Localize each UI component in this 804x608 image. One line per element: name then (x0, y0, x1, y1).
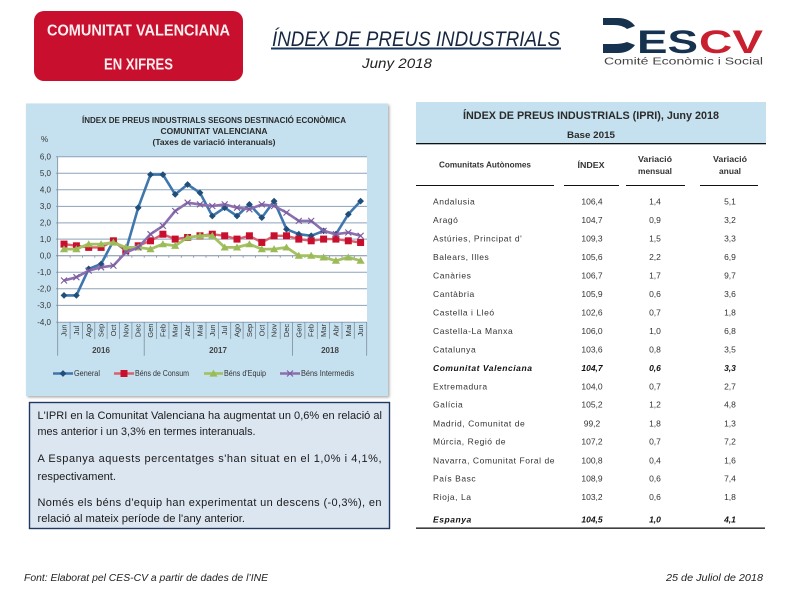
x axis month labels: Feb (307, 324, 316, 337)
x axis month labels (60, 323, 365, 338)
row: Cantàbria (433, 289, 736, 299)
y axis labels: -1,0 (37, 268, 52, 277)
row: Aragó: Aragó (433, 215, 458, 225)
row: Catalunya: 3,5 (724, 344, 736, 354)
row: Castella i Lleó: 0,7 (649, 308, 661, 318)
row: Navarra (433, 456, 736, 466)
row: Astúries: 3,3 (724, 234, 736, 244)
row: Castella i Lleó: 1,8 (724, 308, 736, 318)
row: Espanya: 104,5 (581, 514, 603, 524)
table column headers: Comunitats Autònomes (439, 160, 532, 170)
row: Balears: 105,6 (581, 252, 603, 262)
row: Comunitat Valenciana (433, 363, 736, 373)
logo: CES-CV: ES (637, 24, 698, 60)
x axis month labels: Oct (257, 324, 266, 336)
logo: CES-CV (603, 18, 764, 68)
row: Aragó (433, 215, 736, 225)
row: Castella-La Manxa: Castella-La Manxa (433, 326, 513, 336)
chart title (41, 116, 346, 147)
x axis month labels: Feb (158, 324, 167, 337)
paragraph: Espanya (38, 453, 382, 483)
x axis month labels: Gen (146, 323, 155, 338)
row: Balears (433, 252, 736, 262)
x axis month labels: Jul (220, 325, 229, 335)
y axis labels: 0,0 (40, 252, 52, 260)
x axis year labels: 2017 (209, 346, 227, 355)
row: Balears: 2,2 (649, 252, 661, 262)
row: Balears: Balears, Illes (433, 252, 489, 262)
row: Madrid: 99,2 (584, 418, 601, 428)
row: Castella-La Manxa: 1,0 (649, 326, 661, 336)
row: Espanya: 4,1 (723, 514, 736, 524)
row: Extremadura: 104,0 (581, 382, 603, 392)
y axis labels: -3,0 (37, 301, 52, 310)
title: ÍNDEX DE PREUS INDUSTRIALS (272, 28, 560, 51)
row: Aragó: 3,2 (724, 215, 736, 225)
row: Comunitat Valenciana: 0,6 (649, 363, 661, 373)
row: Cantàbria: 0,6 (649, 289, 661, 299)
x axis month labels: Jun (208, 324, 217, 337)
row: Astúries: 1,5 (649, 234, 661, 244)
x axis month labels: Jun (60, 324, 68, 337)
row: Comunitat Valenciana: 104,7 (581, 363, 604, 373)
x axis month labels: Mar (319, 324, 328, 337)
row: Cantàbria: 105,9 (581, 289, 603, 299)
y axis labels: 5,0 (40, 169, 52, 178)
row: Rioja (433, 492, 736, 502)
x axis year labels: 2016 (92, 346, 110, 355)
row: Castella-La Manxa: 106,0 (581, 326, 603, 336)
row: Espanya (433, 514, 736, 524)
paragraph: IPRI Comunitat Valenciana (38, 410, 382, 438)
table column headers (439, 155, 747, 176)
y axis labels: -4,0 (37, 318, 52, 327)
y axis labels: 2,0 (40, 218, 52, 228)
row: Múrcia (433, 436, 736, 446)
row: País Basc: País Basc (433, 474, 476, 484)
table column headers: Variació (713, 155, 747, 164)
badge: Comunitat Valenciana en xifres: COMUNITAT VALENCIANA (47, 22, 230, 40)
chart legend: General (74, 369, 100, 378)
row: Galícia (433, 400, 736, 410)
subtitle: date: Juny 2018 (361, 55, 432, 71)
table title band: ÍNDEX DE PREUS INDUSTRIALS (IPRI), Juny 2018 (463, 109, 719, 122)
row: Navarra: 1,6 (724, 456, 736, 466)
row: Balears: 6,9 (724, 252, 736, 262)
row: Catalunya: Catalunya (433, 344, 476, 354)
paragraph: Espanya: respectivament. (38, 471, 116, 483)
row: Canàries: 106,7 (581, 270, 603, 280)
paragraph: IPRI Comunitat Valenciana: mes anterior i un 3,3% en termes interanuals. (38, 426, 256, 438)
series: Béns Intermedis (64, 203, 361, 280)
row: Cantàbria: 3,6 (724, 289, 736, 299)
row: Canàries: 1,7 (649, 270, 661, 280)
row: Castella-La Manxa (433, 326, 736, 336)
chart legend: Béns Intermedis (301, 369, 354, 378)
row: Canàries (433, 270, 736, 280)
paragraph: béns d'equip: relació al mateix període de l'any anterior. (38, 513, 245, 525)
row: Navarra: Navarra, Comunitat Foral de (433, 456, 555, 466)
row: País Basc: 108,9 (581, 474, 603, 484)
row: Aragó: 0,9 (649, 215, 661, 225)
table title band: Base 2015 (567, 130, 616, 141)
y axis labels: 1,0 (40, 235, 52, 244)
row: Múrcia: Múrcia, Regió de (433, 436, 506, 446)
plot area (58, 157, 367, 322)
row: Espanya: 1,0 (649, 514, 661, 524)
chart legend: Béns de Consum (135, 369, 189, 378)
x axis month labels: Dec (282, 324, 291, 337)
x axis month labels: Jul (72, 325, 81, 335)
row: Cantàbria: Cantàbria (433, 289, 475, 299)
y axis labels (37, 152, 52, 327)
footer: source: Font: Elaborat pel CES-CV a partir de dades de l’INE (24, 573, 268, 584)
row: Comunitat Valenciana: 3,3 (724, 363, 736, 373)
row: Canàries: 9,7 (724, 270, 736, 280)
logo: CES-CV: Comité Econòmic i Social (604, 56, 763, 68)
row: Astúries (433, 234, 736, 244)
row: Madrid: Madrid, Comunitat de (433, 418, 525, 428)
paragraph: Espanya: A Espanya aquests percentatges s'han situat en el 1,0% i 4,1%, (38, 453, 382, 465)
row: Múrcia: 0,7 (649, 436, 661, 446)
panel: line chart (26, 104, 388, 396)
x axis month labels: Nov (270, 324, 279, 337)
row: Galícia: Galícia (433, 400, 463, 410)
x axis month labels: Ago (84, 324, 93, 337)
y axis labels: 3,0 (40, 202, 52, 211)
row: Rioja: 103,2 (581, 492, 603, 502)
row: Galícia: 4,8 (724, 400, 736, 410)
x axis month labels: Abr (183, 324, 192, 336)
chart title: % (41, 135, 48, 144)
row: Galícia: 1,2 (649, 400, 661, 410)
x axis month labels: Nov (121, 324, 130, 337)
row: Rioja: 1,8 (724, 492, 736, 502)
row: Castella i Lleó: 102,6 (581, 308, 603, 318)
row: Extremadura: Extremadura (433, 382, 488, 392)
paragraph: IPRI Comunitat Valenciana: L'IPRI en la Comunitat Valenciana ha augmentat un 0,6% en relació al (38, 410, 382, 422)
row: Catalunya (433, 344, 736, 354)
row: Espanya: Espanya (433, 514, 472, 524)
row: País Basc: 0,6 (649, 474, 661, 484)
y axis labels: 6,0 (40, 152, 52, 162)
row: País Basc: 7,4 (724, 474, 736, 484)
x axis month labels: Sep (245, 324, 254, 337)
row: Andalusia (433, 196, 736, 206)
badge: Comunitat Valenciana en xifres: EN XIFRES (104, 56, 173, 74)
x axis year labels: 2018 (321, 346, 339, 355)
row: Andalusia: 106,4 (581, 196, 603, 206)
series: Béns de Consum (64, 234, 361, 251)
row: Múrcia: 107,2 (581, 436, 603, 446)
x axis month labels: Ago (232, 324, 242, 337)
y axis labels: -2,0 (37, 284, 52, 294)
row: Navarra: 100,8 (581, 456, 603, 466)
row: Extremadura (433, 382, 736, 392)
row: Comunitat Valenciana: Comunitat Valenciana (433, 363, 532, 373)
panel: data table (416, 102, 766, 529)
row: Castella-La Manxa: 6,8 (724, 326, 736, 336)
row: País Basc (433, 474, 736, 484)
chart title: COMUNITAT VALENCIANA (160, 127, 268, 136)
x axis month labels: Abr (331, 324, 340, 336)
x axis month labels: Dec (134, 324, 143, 337)
chart legend (53, 369, 354, 378)
row: Navarra: 0,4 (649, 456, 661, 466)
row: Andalusia: Andalusia (433, 196, 475, 206)
chart legend: Béns d'Equip (224, 369, 266, 378)
row: Canàries: Canàries (433, 270, 471, 280)
paragraph: béns d'equip: Només els béns d'equip han experimentat un descens (-0,3%), en (38, 497, 382, 509)
x axis year labels (92, 346, 339, 355)
row: Aragó: 104,7 (581, 215, 603, 225)
y axis labels: 4,0 (40, 186, 52, 194)
row: Astúries: Astúries, Principat d' (433, 234, 522, 244)
footer: date: 25 de Juliol de 2018 (665, 573, 763, 584)
row: Madrid: 1,3 (724, 418, 736, 428)
row: Andalusia: 5,1 (724, 196, 736, 206)
x axis month labels: Mar (171, 324, 180, 337)
row: Astúries: 109,3 (581, 234, 603, 244)
chart title: ÍNDEX DE PREUS INDUSTRIALS SEGONS DESTINACIÓ ECONÒMICA (82, 116, 346, 125)
row: Múrcia: 7,2 (724, 436, 736, 446)
row: Madrid (433, 418, 736, 428)
badge: Comunitat Valenciana en xifres (34, 11, 243, 81)
row: Catalunya: 0,8 (649, 344, 661, 354)
row: Extremadura: 2,7 (724, 382, 736, 392)
table column headers: Variació (638, 155, 672, 164)
row: Catalunya: 103,6 (581, 344, 603, 354)
row: Rioja: 0,6 (649, 492, 661, 502)
table column headers: mensual (638, 167, 672, 176)
series: Béns d'Equip (64, 236, 361, 261)
table title band (416, 102, 766, 143)
x axis month labels: Mai (196, 324, 204, 337)
row: Andalusia: 1,4 (649, 196, 661, 206)
x axis month labels: Oct (109, 324, 118, 336)
x axis month labels: Jun (356, 324, 365, 337)
row: Rioja: Rioja, La (433, 492, 472, 502)
paragraph: béns d'equip (38, 497, 382, 525)
table column headers: ÍNDEX (578, 161, 605, 170)
panel: commentary text (30, 402, 390, 528)
logo: CES-CV: CV (699, 24, 764, 60)
table column headers: anual (719, 167, 741, 176)
row: Castella i Lleó (433, 308, 736, 318)
row: Galícia: 105,2 (581, 400, 603, 410)
row: Extremadura: 0,7 (649, 382, 661, 392)
row: Madrid: 1,8 (649, 418, 661, 428)
x axis month labels: Sep (97, 324, 106, 337)
chart title: (Taxes de variació interanuals) (152, 138, 276, 147)
x axis month labels: Gen (294, 323, 303, 338)
row: Castella i Lleó: Castella i Lleó (433, 308, 495, 318)
x axis month labels: Mai (344, 324, 353, 337)
series: General (64, 175, 361, 295)
